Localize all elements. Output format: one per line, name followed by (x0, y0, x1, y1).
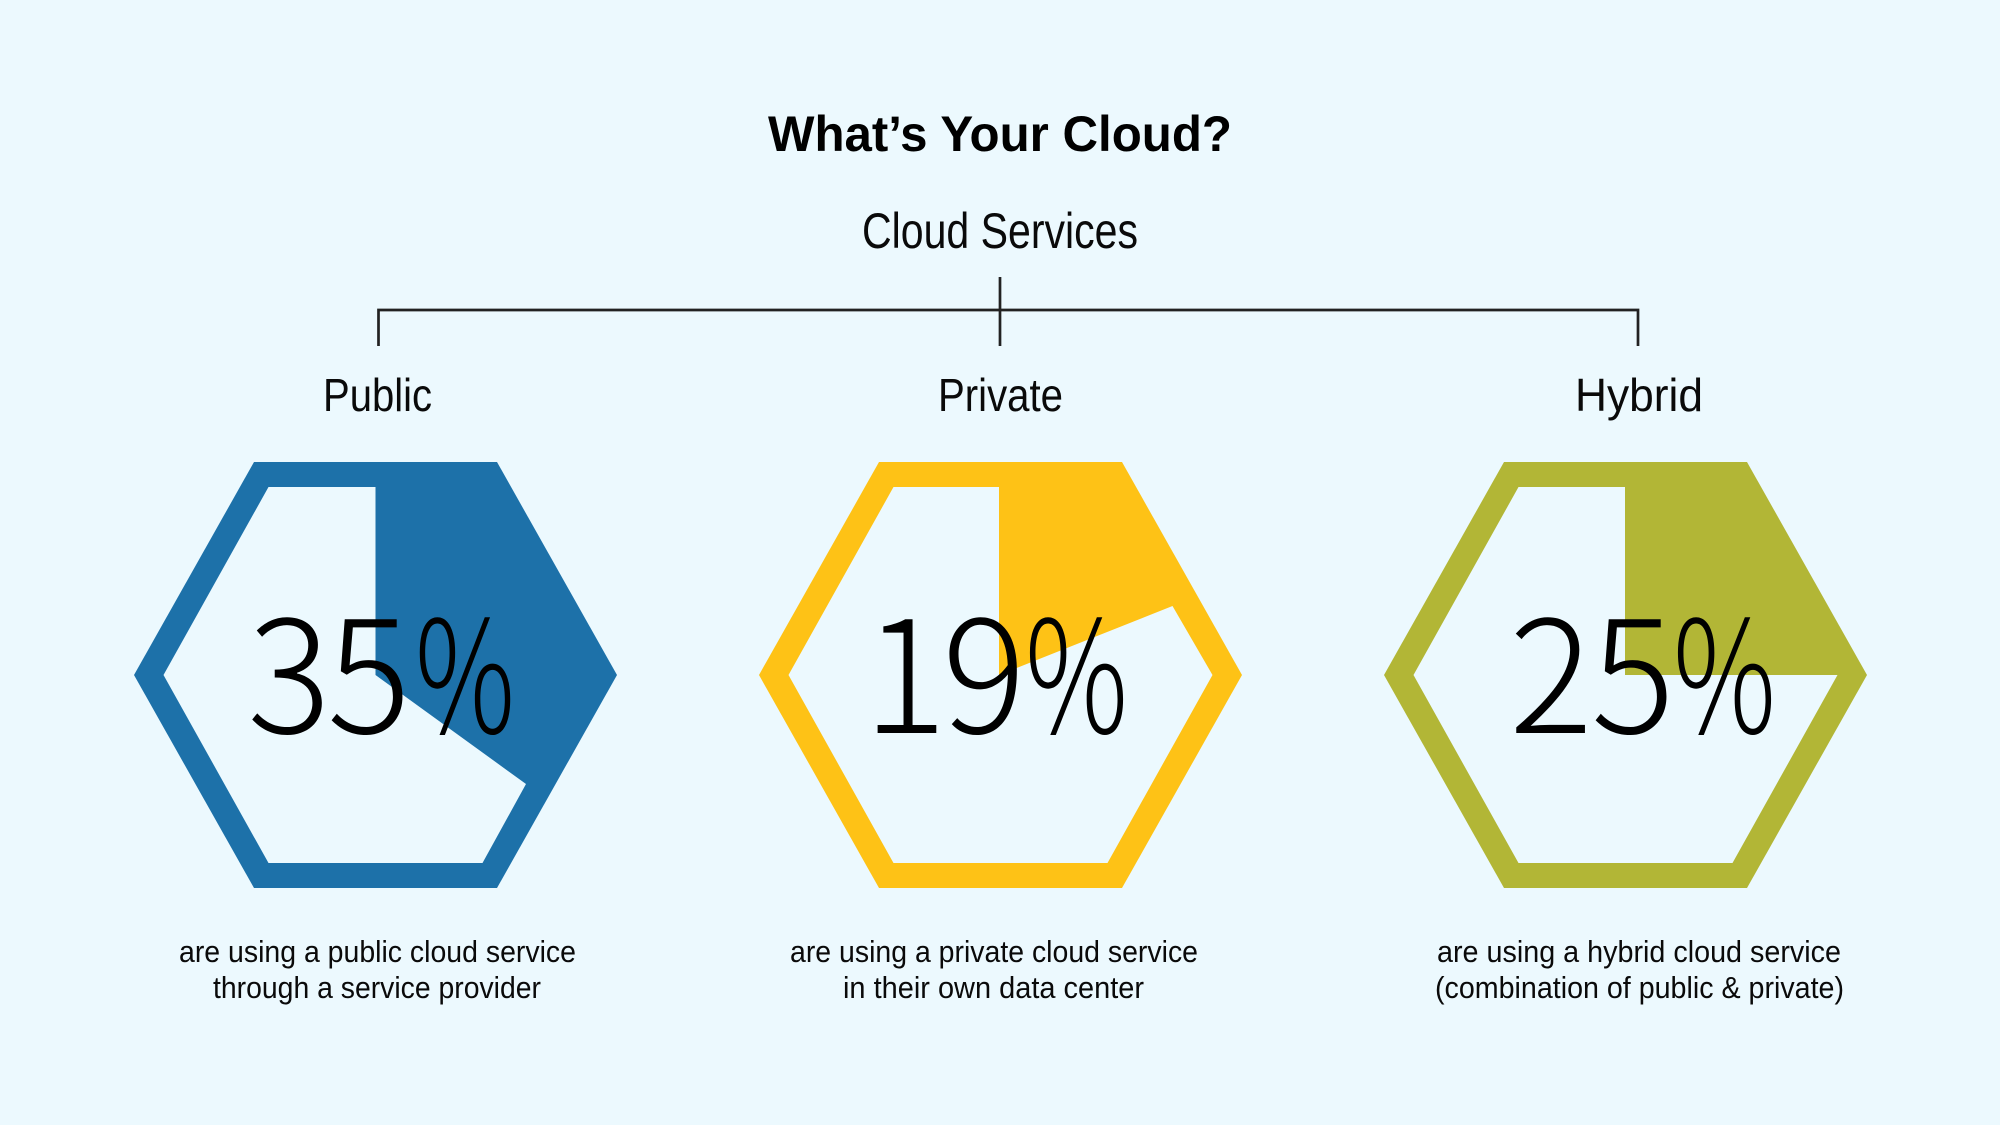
hexagon chart: 25% (1384, 462, 1867, 888)
number: 25%: 25 (1509, 552, 1675, 778)
number: 19% (863, 552, 1128, 778)
panel: hybrid (1384, 369, 1867, 1005)
title: What’s Your Cloud? (768, 106, 1232, 162)
subtitle: cloud services: Cloud Services (862, 203, 1138, 259)
number: 35%: % (415, 552, 515, 778)
description: private (790, 934, 1198, 1005)
description: hybrid: are using a hybrid cloud service (1437, 934, 1841, 969)
description: hybrid: (combination of public & private) (1435, 970, 1844, 1005)
panel: private (759, 369, 1242, 1005)
number: 35%: 35 (247, 552, 411, 778)
description: hybrid (1435, 934, 1844, 1005)
description: public: through a service provider (213, 970, 541, 1005)
hexagon chart: 35% (134, 462, 617, 888)
heading: public: Public (323, 369, 432, 421)
number: 35% (247, 552, 515, 778)
number: 19%: 19 (863, 552, 1026, 778)
number: 25%: % (1673, 552, 1776, 778)
panel: public (134, 369, 617, 1005)
heading: hybrid: Hybrid (1575, 369, 1703, 421)
description: public (179, 934, 576, 1005)
connector bracket (378, 277, 1638, 346)
number: 19%: % (1025, 552, 1128, 778)
heading: private: Private (938, 369, 1063, 421)
description: public: are using a public cloud service (179, 934, 576, 969)
description: private: in their own data center (843, 970, 1144, 1005)
number: 25% (1509, 552, 1776, 778)
hexagon chart: 19% (759, 462, 1242, 888)
description: private: are using a private cloud service (790, 934, 1198, 969)
